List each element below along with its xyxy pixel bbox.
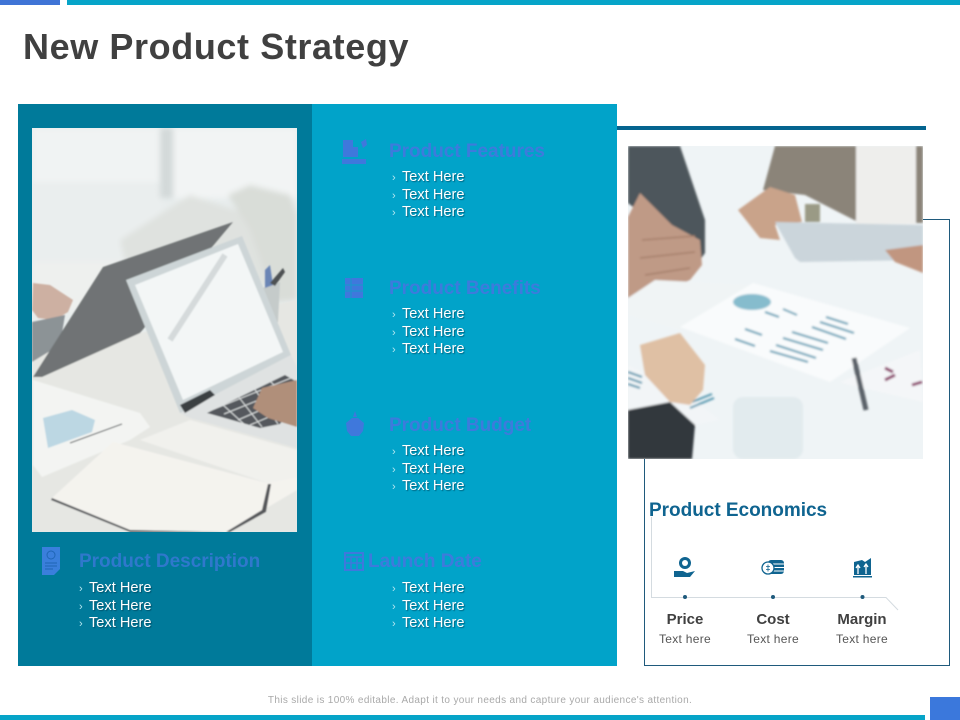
list: product features: › [392, 207, 396, 219]
list: product benefits: Text Here [402, 324, 464, 340]
list: product budget: › [392, 481, 396, 493]
list: launch date [392, 580, 466, 631]
list: product features [392, 169, 466, 220]
list: product description: › [79, 583, 83, 595]
icon: product budget [346, 411, 364, 436]
list: product features: › [392, 190, 396, 202]
label: cost: Cost [756, 611, 790, 628]
header rule above photo [617, 126, 926, 130]
label: margin: Text here [836, 632, 888, 646]
list: product budget: Text Here [402, 461, 464, 477]
timeline dots [683, 595, 864, 599]
list: product description: › [79, 618, 83, 630]
photo: laptops on desk [32, 128, 297, 532]
list: product budget [392, 443, 466, 494]
list: launch date: Text Here [402, 598, 464, 614]
icon: product features [342, 139, 367, 164]
heading: product features: Product Features [389, 141, 545, 162]
list: product benefits [392, 306, 466, 357]
label: price: Price [667, 611, 703, 628]
icon: product benefits [345, 278, 363, 298]
list: product benefits: Text Here [402, 341, 464, 357]
page number block [930, 697, 960, 720]
icon: margin, bars with arrows [853, 558, 872, 578]
list: launch date: Text Here [402, 615, 464, 631]
footer note: This slide is 100% editable. Adapt it to your needs and capture your audience's attention. [268, 695, 692, 706]
list: product description: Text Here [89, 580, 151, 596]
icon: launch date calendar [344, 552, 364, 571]
icon: price, hand with coin [674, 557, 695, 577]
heading: product budget: Product Budget [389, 415, 531, 436]
list: product benefits: › [392, 309, 396, 321]
label: cost [747, 611, 799, 646]
list: product description: Text Here [89, 615, 151, 631]
label: cost: Text here [747, 632, 799, 646]
list: product features: Text Here [402, 204, 464, 220]
list: product features: › [392, 172, 396, 184]
panel: product details [312, 104, 617, 666]
top accent bar [0, 0, 960, 5]
list: product benefits: › [392, 327, 396, 339]
list: product description [79, 580, 152, 631]
label: margin [836, 611, 888, 646]
list: product budget: › [392, 464, 396, 476]
list: product description: › [79, 601, 83, 613]
label: margin: Margin [837, 611, 887, 628]
list: product benefits: Text Here [402, 306, 464, 322]
label: price [659, 611, 711, 646]
list: launch date: › [392, 601, 396, 613]
heading: product description: Product Description [79, 551, 260, 572]
list: launch date: › [392, 583, 396, 595]
heading: launch date: Launch Date [368, 551, 482, 572]
icon: product description document [42, 547, 60, 575]
panel: product economics frame [644, 219, 950, 666]
label: price: Text here [659, 632, 711, 646]
heading: product benefits: Product Benefits [389, 278, 541, 299]
list: product budget: Text Here [402, 478, 464, 494]
title: New Product Strategy [23, 26, 409, 67]
icon: cost, coin stack [761, 560, 784, 575]
panel: product description [18, 104, 312, 666]
bottom accent bar [0, 715, 925, 720]
list: launch date: › [392, 618, 396, 630]
list: product budget: Text Here [402, 443, 464, 459]
list: launch date: Text Here [402, 580, 464, 596]
list: product features: Text Here [402, 187, 464, 203]
list: product benefits: › [392, 344, 396, 356]
list: product features: Text Here [402, 169, 464, 185]
list: product description: Text Here [89, 598, 151, 614]
photo: business meeting [628, 146, 923, 459]
heading: product economics: Product Economics [649, 500, 827, 521]
list: product budget: › [392, 446, 396, 458]
